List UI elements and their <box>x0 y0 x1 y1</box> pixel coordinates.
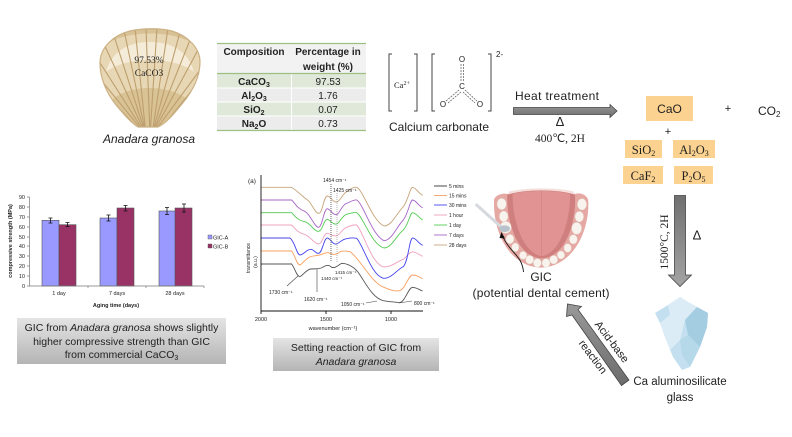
legend: GIC-B <box>213 244 229 250</box>
peak labels: 1620 cm⁻¹ <box>304 297 328 303</box>
table header: Percentage in <box>295 47 361 58</box>
box: SiO2: 2 <box>651 149 655 158</box>
x axis title: Aging time (days) <box>93 303 139 309</box>
table header: weight (%) <box>302 62 353 73</box>
species name: Anadara granosa <box>102 132 195 146</box>
box: Al2O3: 2 <box>692 149 696 158</box>
table rows <box>238 77 341 131</box>
shell label: 97.53% <box>134 56 164 66</box>
y axis labels: 60 <box>19 225 25 231</box>
x axis labels: 28 days <box>165 291 185 297</box>
caption: compressive strength: higher compressive strength than GIC <box>33 336 210 348</box>
table rows: CaCO <box>238 77 266 88</box>
composition table <box>217 43 366 131</box>
arrow: acid-base reaction <box>566 304 631 386</box>
y axis labels: 0 <box>22 284 25 290</box>
y axis labels: 50 <box>19 235 25 241</box>
box: Al2O3 <box>673 140 715 158</box>
legend: 7 days <box>449 233 464 239</box>
plus sign: + <box>725 103 731 115</box>
legend: 15 mins <box>449 194 467 200</box>
table rows: Na <box>242 119 255 130</box>
leader lines <box>287 269 412 303</box>
y axis unit: (a.u.) <box>253 256 259 268</box>
caption: compressive strength: GIC from Anadara granosa shows slightly <box>25 322 219 334</box>
label: CO2: 2 <box>776 110 781 119</box>
bar chart: compressive strength <box>8 195 229 309</box>
y axis labels: 70 <box>19 215 25 221</box>
x axis labels: 1 day <box>52 291 66 297</box>
table rows: O <box>255 91 263 102</box>
legend <box>434 184 467 249</box>
caption: compressive strength: 3 <box>174 355 178 362</box>
table rows: 97.53 <box>315 77 341 88</box>
icon: dental arch <box>477 188 588 268</box>
legend <box>208 235 229 250</box>
box: P2O5: O <box>692 169 701 183</box>
panel letter: (a) <box>248 178 256 185</box>
x axis title: wavenumber (cm⁻¹) <box>308 326 358 332</box>
calcium carbonate structure <box>389 50 503 111</box>
y axis labels: 10 <box>19 274 25 280</box>
table rows: O <box>258 119 266 130</box>
table rows: 2 <box>261 110 265 117</box>
box: P2O5 <box>674 166 713 184</box>
y axis labels: 30 <box>19 254 25 260</box>
calcium carbonate structure: O <box>477 100 483 109</box>
axis tick labels <box>255 317 397 323</box>
box: CaF2: 2 <box>651 175 655 184</box>
box: SiO2: SiO <box>632 143 651 157</box>
spectra curves <box>261 187 423 303</box>
calcium carbonate structure: O <box>440 100 446 109</box>
table rows: 3 <box>266 82 270 89</box>
arrow: 1500C down <box>659 196 702 286</box>
label: GIC: GIC <box>530 270 552 284</box>
x axis labels <box>52 291 185 297</box>
legend: 1 day <box>449 223 462 229</box>
y axis title: transmittance <box>246 243 252 273</box>
peak labels: 1415 cm⁻¹ <box>335 270 357 275</box>
table rows: 3 <box>263 96 267 103</box>
box: Al2O3: O <box>696 143 705 157</box>
table rows: 2 <box>251 96 255 103</box>
axis tick labels: 1500 <box>320 317 332 323</box>
calcium carbonate structure: Ca <box>394 80 403 90</box>
label: CO2: CO <box>758 104 776 118</box>
arrow: heat treatment <box>514 89 617 145</box>
caption: compressive strength: from commercial CaCO <box>65 349 174 361</box>
box: CaO <box>646 96 693 121</box>
peak labels: 1440 cm⁻¹ <box>321 276 343 281</box>
peak markers <box>330 184 337 262</box>
box: CaO: CaO <box>657 102 682 116</box>
peak labels: 1730 cm⁻¹ <box>269 290 293 296</box>
box: P2O5: 2 <box>688 175 692 184</box>
axis tick labels: 1000 <box>385 317 397 323</box>
arrow: 1500C down: 1500°C, 2H <box>659 214 671 270</box>
box: P2O5: P <box>682 169 688 183</box>
axes <box>27 197 204 288</box>
icon: glass shard <box>655 297 708 370</box>
legend: 5 mins <box>449 184 464 190</box>
y axis labels <box>19 195 25 290</box>
arrow: acid-base reaction: Acid-base <box>592 319 631 365</box>
FTIR chart <box>246 175 467 332</box>
swab applicator <box>477 205 502 227</box>
label: Ca aluminosilicate glass: glass <box>667 392 694 404</box>
calcium carbonate structure: 2- <box>496 50 503 59</box>
y axis labels: 90 <box>19 195 25 201</box>
arrow: heat treatment: Δ <box>556 114 565 129</box>
teeth <box>497 198 587 267</box>
table rows: 2 <box>255 124 259 131</box>
label: Ca aluminosilicate glass: Ca aluminosilicate <box>633 376 727 388</box>
y axis labels: 20 <box>19 264 25 270</box>
table rows: 0.07 <box>318 105 338 116</box>
caption: setting reaction: Setting reaction of GIC from <box>291 342 421 354</box>
arrow: to GIC tooth <box>500 232 524 272</box>
x axis labels: 7 days <box>109 291 125 297</box>
legend: 28 days <box>449 243 467 249</box>
caption: setting reaction: Anadara granosa <box>315 356 396 368</box>
table rows: 0.73 <box>318 119 338 130</box>
arrow: 1500C down: Δ <box>693 228 702 242</box>
peak labels <box>269 178 435 308</box>
caption: setting reaction <box>273 338 439 371</box>
label: calcium carbonate: Calcium carbonate <box>389 120 489 134</box>
calcium carbonate structure: C <box>459 82 465 91</box>
legend: GIC-A <box>213 236 229 242</box>
peak labels: 1050 cm⁻¹ <box>341 302 365 308</box>
table rows: 1.76 <box>318 91 338 102</box>
caption: compressive strength <box>17 318 226 364</box>
peak labels: 800 cm⁻¹ <box>414 301 435 307</box>
error bars <box>48 204 186 226</box>
shell label: CaCO3 <box>135 69 164 79</box>
peak labels: 1425 cm⁻¹ <box>333 188 357 194</box>
box: SiO2 <box>625 140 662 158</box>
arrow: acid-base reaction: reaction <box>576 338 609 376</box>
table rows: Al <box>241 91 251 102</box>
box: P2O5: 5 <box>701 175 705 184</box>
legend: 30 mins <box>449 203 467 209</box>
label: potential dental cement: (potential dental cement) <box>472 286 610 300</box>
axis tick labels: 2000 <box>255 317 267 323</box>
peak labels: 1454 cm⁻¹ <box>323 178 347 184</box>
box: Al2O3: Al <box>679 143 692 157</box>
calcium carbonate structure: 2+ <box>403 81 410 87</box>
box: Al2O3: 3 <box>705 149 709 158</box>
calcium carbonate structure: O <box>459 55 465 64</box>
y axis title: compressive strength (MPa) <box>8 204 14 278</box>
table header: Composition <box>223 47 285 58</box>
y axis labels: 40 <box>19 244 25 250</box>
plus sign: + <box>665 126 671 138</box>
box: CaF2 <box>623 166 663 184</box>
axes <box>261 175 423 314</box>
table rows: SiO <box>243 105 261 116</box>
bars <box>42 208 192 286</box>
icon: Anadara granosa shell <box>99 28 201 128</box>
box: CaF2: CaF <box>631 169 651 183</box>
arrow: heat treatment: Heat treatment <box>515 89 600 103</box>
arrow: heat treatment: 400℃, 2H <box>535 133 585 145</box>
y axis labels: 80 <box>19 205 25 211</box>
legend: 1 hour <box>449 213 464 219</box>
